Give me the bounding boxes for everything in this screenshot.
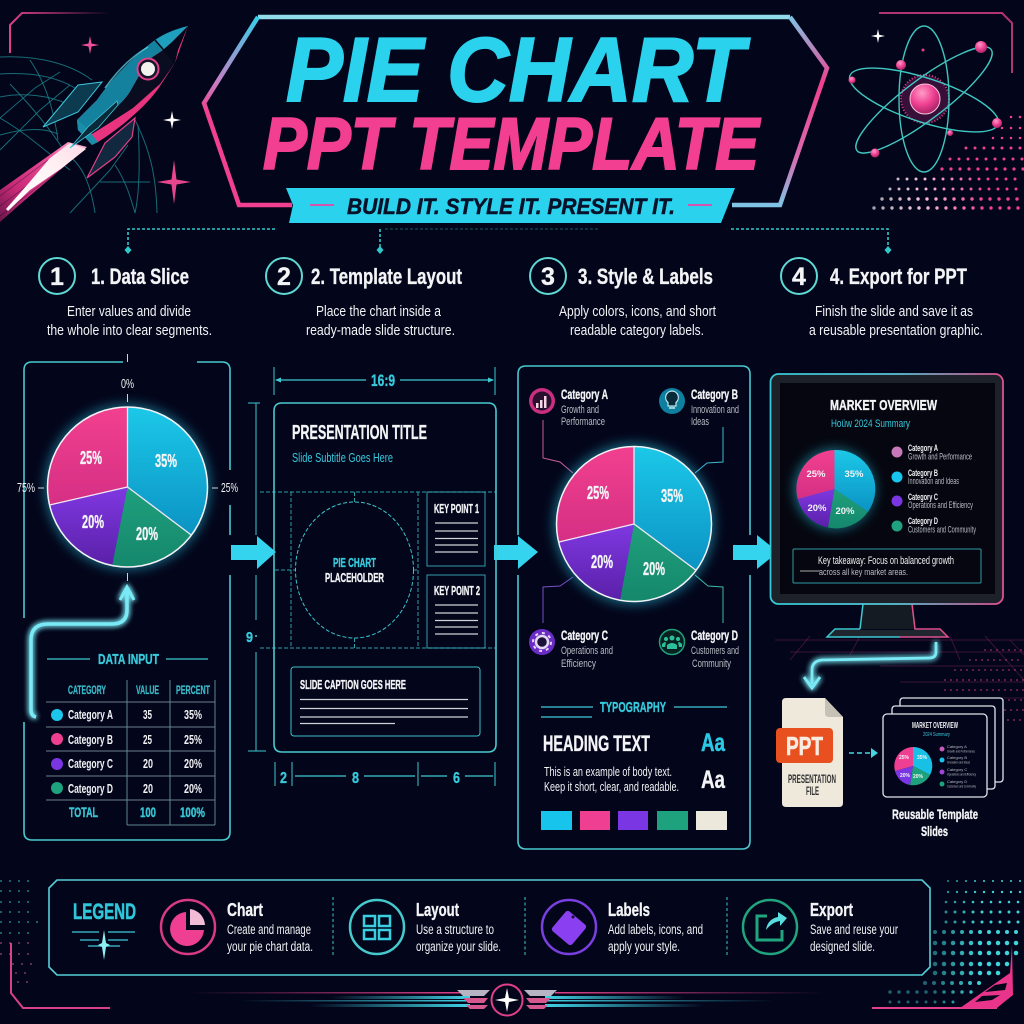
reusable slide stack: [883, 698, 1003, 797]
legend item: chart: Chart: [227, 900, 263, 920]
layout guides: [260, 492, 496, 648]
corner frame: bottom right: [872, 945, 1013, 1008]
legend heading: LEGEND: [73, 899, 136, 924]
step 1: [39, 258, 212, 339]
pie chart: mini: 20%: [900, 773, 911, 779]
halftone: top right: [874, 117, 1024, 208]
pie chart: monitor: 35%: [844, 469, 864, 480]
panel: data slice: [17, 354, 238, 840]
pie chart: monitor: 25%: [806, 469, 826, 480]
callout: category B: Innovation and: [691, 404, 739, 416]
mini slide heading: MARKET OVERVIEW: [912, 721, 958, 730]
halftone: bottom right: [890, 881, 1024, 1002]
data input table: CATEGORY: [68, 683, 106, 697]
icon: pie chart: [161, 900, 215, 954]
slide height dimension: [246, 403, 266, 751]
data input table: PERCENT: [176, 683, 210, 697]
icon: stars: [81, 36, 191, 204]
data input table: Category B: [68, 732, 113, 747]
step 1 badge: [39, 258, 75, 294]
percent scale ticks: 25%: [221, 480, 238, 495]
illustration: atom: [843, 26, 1005, 172]
data input table: Category D: [68, 781, 113, 796]
step 2 description: Place the chart inside a: [316, 303, 442, 320]
pie chart: data slice: 20%: [82, 512, 104, 532]
title: PPT TEMPLATE: [263, 102, 761, 185]
pie chart: styled: 25%: [587, 483, 609, 503]
mini slide legend: Operations and Efficiency: [947, 772, 976, 776]
illustration: wireframe globe: [0, 57, 157, 213]
step 2 heading: 2. Template Layout: [311, 264, 463, 289]
rocket body: [70, 26, 188, 148]
legend item: export: Save and reuse your: [810, 922, 898, 937]
slide title: PRESENTATION TITLE: [292, 422, 427, 444]
pie chart: data slice: [46, 405, 210, 569]
step 4 description: a reusable presentation graphic.: [809, 322, 983, 339]
mini slide legend: [940, 744, 976, 788]
step 3 description: Apply colors, icons, and short: [559, 303, 717, 320]
pie chart: data slice: 35%: [155, 451, 177, 471]
grid width dimension 2 8 6: 6: [453, 770, 460, 787]
step 4 heading: 4. Export for PPT: [830, 264, 967, 289]
key takeaway box: [793, 549, 981, 583]
data input table: [46, 680, 215, 825]
step 3 description: readable category labels.: [570, 322, 704, 339]
title: [263, 20, 761, 185]
pie chart: mini: 20%: [913, 774, 924, 780]
monitor stand: [827, 604, 948, 637]
panel: template layout: [246, 367, 496, 787]
arrow: data to chart: [31, 587, 134, 717]
rocket flame: [0, 142, 87, 222]
callout: category B: [659, 386, 739, 428]
illustration: rocket: [0, 26, 188, 222]
key point 1: [427, 492, 485, 566]
monitor legend: Category B: [908, 468, 938, 478]
key takeaway box: across all key market areas.: [819, 567, 908, 577]
typography sample: Keep it short, clear, and readable.: [544, 779, 679, 794]
pie chart: styled: [554, 444, 714, 604]
percent scale ticks: 75%: [17, 480, 35, 495]
step 4 badge: 4: [792, 263, 806, 291]
pie chart: mini: 35%: [917, 755, 928, 761]
legend item: layout: [350, 900, 501, 954]
monitor legend: Operations and Efficiency: [908, 500, 973, 510]
corner frame: top left: [10, 13, 110, 53]
step 3 description: [559, 303, 717, 339]
data input table: 20%: [184, 781, 202, 796]
callout: category A: Category A: [561, 386, 608, 402]
slide caption: SLIDE CAPTION GOES HERE: [300, 677, 406, 692]
pie chart placeholder: [296, 502, 414, 638]
step 3 badge: [530, 258, 566, 294]
key point 2: [427, 575, 485, 648]
key point 1: KEY POINT 1: [434, 502, 479, 516]
mini slide legend: Category A: [947, 744, 967, 749]
monitor legend: Category A: [908, 443, 938, 453]
percent scale ticks: [17, 354, 238, 581]
callout: category D: [660, 627, 739, 670]
slide caption: [291, 667, 480, 736]
callout: category C: Efficiency: [561, 658, 596, 670]
pie chart placeholder: PIE CHART: [333, 556, 376, 570]
pie chart: data slice: 20%: [136, 524, 158, 544]
mini slide legend: Growth and Performance: [947, 748, 975, 754]
step 2 badge: 2: [277, 263, 291, 291]
callout: category D: Community: [692, 658, 731, 670]
icon: export arrow: [743, 900, 797, 954]
pie chart: monitor: 20%: [807, 503, 827, 514]
data input table: 35%: [184, 707, 202, 722]
connector: title to steps: [124, 229, 892, 254]
pie chart placeholder: PLACEHOLDER: [325, 571, 384, 585]
data input table: Category A: [68, 707, 113, 722]
pie chart: monitor: 20%: [835, 506, 855, 517]
grid width dimension 2 8 6: 8: [352, 770, 359, 787]
step 2 badge: [266, 258, 302, 294]
legend item: layout: Layout: [416, 900, 459, 920]
mini slide subheading: 2024 Summary: [923, 732, 950, 738]
monitor legend: Category C: [908, 492, 938, 502]
callout: category C: Category C: [561, 627, 608, 643]
key point 2: KEY POINT 2: [434, 584, 480, 598]
typography sample: [543, 729, 726, 794]
step 4 badge: [781, 258, 817, 294]
legend item: labels: Add labels, icons, and: [608, 922, 703, 937]
typography sample: This is an example of body text.: [544, 764, 672, 779]
legend item: layout: organize your slide.: [416, 939, 501, 954]
icon: people: [660, 630, 684, 654]
step 1 heading: 1. Data Slice: [91, 264, 189, 289]
slide subtitle: Slide Subtitle Goes Here: [292, 451, 393, 465]
callout: category A: Growth and: [561, 404, 599, 416]
mini slide legend: Category D: [947, 779, 967, 784]
step 2 description: ready-made slide structure.: [306, 322, 455, 339]
rocket window: [138, 58, 158, 80]
icon: legend wings: [72, 930, 135, 960]
PPT file icon: PPT: [786, 731, 823, 761]
mini slide legend: Category C: [947, 767, 967, 772]
monitor: [770, 374, 1003, 637]
monitor legend: Growth and Performance: [908, 452, 972, 462]
PPT file icon: PRESENTATION: [788, 774, 836, 786]
halftone: right of monitor: [945, 650, 1024, 720]
legend item: labels: [542, 900, 703, 954]
data input table: Category C: [68, 756, 113, 771]
arrow: panel 2 to panel 3: [494, 536, 538, 569]
slide frame: [274, 403, 496, 752]
data input table: 25%: [184, 732, 202, 747]
data input table: 100: [140, 804, 156, 820]
step 4 description: Finish the slide and save it as: [815, 303, 973, 320]
slide heading: MARKET OVERVIEW: [830, 397, 938, 414]
icon: gear: [529, 629, 555, 655]
legend item: export: Export: [810, 900, 853, 920]
grid width dimension 2 8 6: [275, 762, 495, 787]
legend item: layout: Use a structure to: [416, 922, 494, 937]
icon: layout grid: [350, 900, 404, 954]
rocket left fin: [43, 82, 102, 127]
step 1 description: the whole into clear segments.: [47, 322, 212, 339]
step 1 description: Enter values and divide: [67, 303, 191, 320]
legend item: export: [743, 900, 898, 954]
pie chart: mini: 25%: [899, 755, 910, 761]
pie chart: styled: 35%: [661, 486, 683, 506]
caption: reusable template slides: Reusable Template: [892, 806, 978, 822]
typography heading: TYPOGRAPHY: [600, 699, 666, 716]
connector lines: [543, 420, 723, 623]
typography sample: HEADING TEXT: [543, 731, 650, 756]
callout: category B: Category B: [691, 386, 738, 402]
rocket right fin: [87, 118, 135, 178]
corner frame: bottom left: [11, 943, 110, 1008]
PPT file icon: FILE: [806, 786, 819, 798]
typography sample: Aa: [701, 766, 726, 794]
mini slide legend: Innovation and Ideas: [947, 760, 970, 764]
step 2: [266, 258, 463, 339]
arrow: panel 1 to panel 2: [231, 536, 276, 569]
arrow: panel 3 to panel 4: [733, 535, 778, 569]
key takeaway box: Key takeaway: Focus on balanced growth: [818, 555, 954, 567]
callout: category C: [529, 627, 613, 670]
pie chart: monitor: [794, 449, 875, 529]
step 3: [530, 258, 717, 339]
step 1 badge: 1: [50, 263, 64, 291]
data input table: TOTAL: [69, 804, 98, 820]
pie chart: data slice: 25%: [80, 448, 102, 468]
step 3 badge: 3: [541, 263, 555, 291]
callout: category B: Ideas: [691, 416, 709, 428]
title frame: [204, 17, 827, 205]
monitor screen: [780, 383, 995, 594]
percent scale ticks: 0%: [121, 376, 134, 391]
mini slide legend: Category B: [947, 755, 967, 760]
legend item: labels: apply your style.: [608, 939, 680, 954]
data input table: 25: [143, 732, 152, 747]
legend item: chart: [161, 900, 313, 954]
PPT file icon: [776, 698, 843, 807]
slide size dimension 16:9: [274, 367, 495, 395]
monitor legend: [892, 443, 976, 534]
legend item: export: designed slide.: [810, 939, 875, 954]
pie chart: styled: 20%: [591, 552, 613, 572]
tagline banner: BUILD IT. STYLE IT. PRESENT IT.: [347, 194, 675, 219]
step 3 heading: 3. Style & Labels: [578, 264, 713, 289]
callout: category A: Performance: [561, 416, 605, 428]
pie chart: styled: 20%: [643, 559, 665, 579]
background grid floor: [775, 636, 1024, 698]
data input table: 100%: [180, 804, 205, 820]
arrow: file to slides: [849, 748, 878, 758]
slide size dimension 16:9: 16:9: [371, 371, 395, 390]
legend item: chart: your pie chart data.: [227, 939, 313, 954]
caption: reusable template slides: [892, 806, 978, 839]
legend item: chart: Create and manage: [227, 922, 311, 937]
data input table: 20: [143, 781, 153, 796]
icon: light bulb: [659, 388, 685, 414]
monitor legend: Innovation and Ideas: [908, 476, 959, 486]
grid width dimension 2 8 6: 2: [280, 770, 287, 787]
legend item: labels: Labels: [608, 900, 650, 920]
typography sample: Aa: [701, 729, 726, 757]
mini slide legend: Customers and Community: [947, 784, 976, 788]
caption: reusable template slides: Slides: [921, 823, 948, 839]
monitor frame: [770, 374, 1003, 604]
footer emblem: [190, 984, 825, 1016]
callout: category D: Customers and: [691, 645, 739, 657]
panel: legend: [49, 880, 930, 975]
tagline banner: [286, 188, 735, 223]
icon: label tag: [542, 900, 596, 954]
arrow: monitor to file: [804, 642, 936, 688]
step 4 description: [809, 303, 983, 339]
callout: category D: Category D: [691, 627, 738, 643]
colour swatches: [541, 811, 727, 830]
monitor legend: Customers and Community: [908, 524, 976, 534]
slide height dimension: 9: [246, 629, 253, 646]
data input table: 20: [143, 756, 153, 771]
monitor legend: Category D: [908, 516, 938, 526]
data input table: 35: [143, 707, 152, 722]
data input table: VALUE: [136, 683, 159, 697]
icon: bar chart: [529, 388, 555, 414]
title: PIE CHART: [286, 20, 750, 121]
step 2 description: [306, 303, 455, 339]
pie chart: mini: [894, 747, 932, 785]
step 4: [781, 258, 983, 339]
data input table: 20%: [184, 756, 202, 771]
panel: style and labels: [518, 366, 750, 849]
callout: category C: Operations and: [561, 645, 613, 657]
data input heading: DATA INPUT: [98, 651, 159, 668]
step 1 description: [47, 303, 212, 339]
callout: category A: [529, 386, 608, 428]
halftone: bottom left: [1, 881, 38, 982]
corner frame: top right: [879, 13, 1012, 73]
slide subheading: Hoüw 2024 Summary: [831, 418, 910, 430]
typography heading: [541, 699, 727, 717]
